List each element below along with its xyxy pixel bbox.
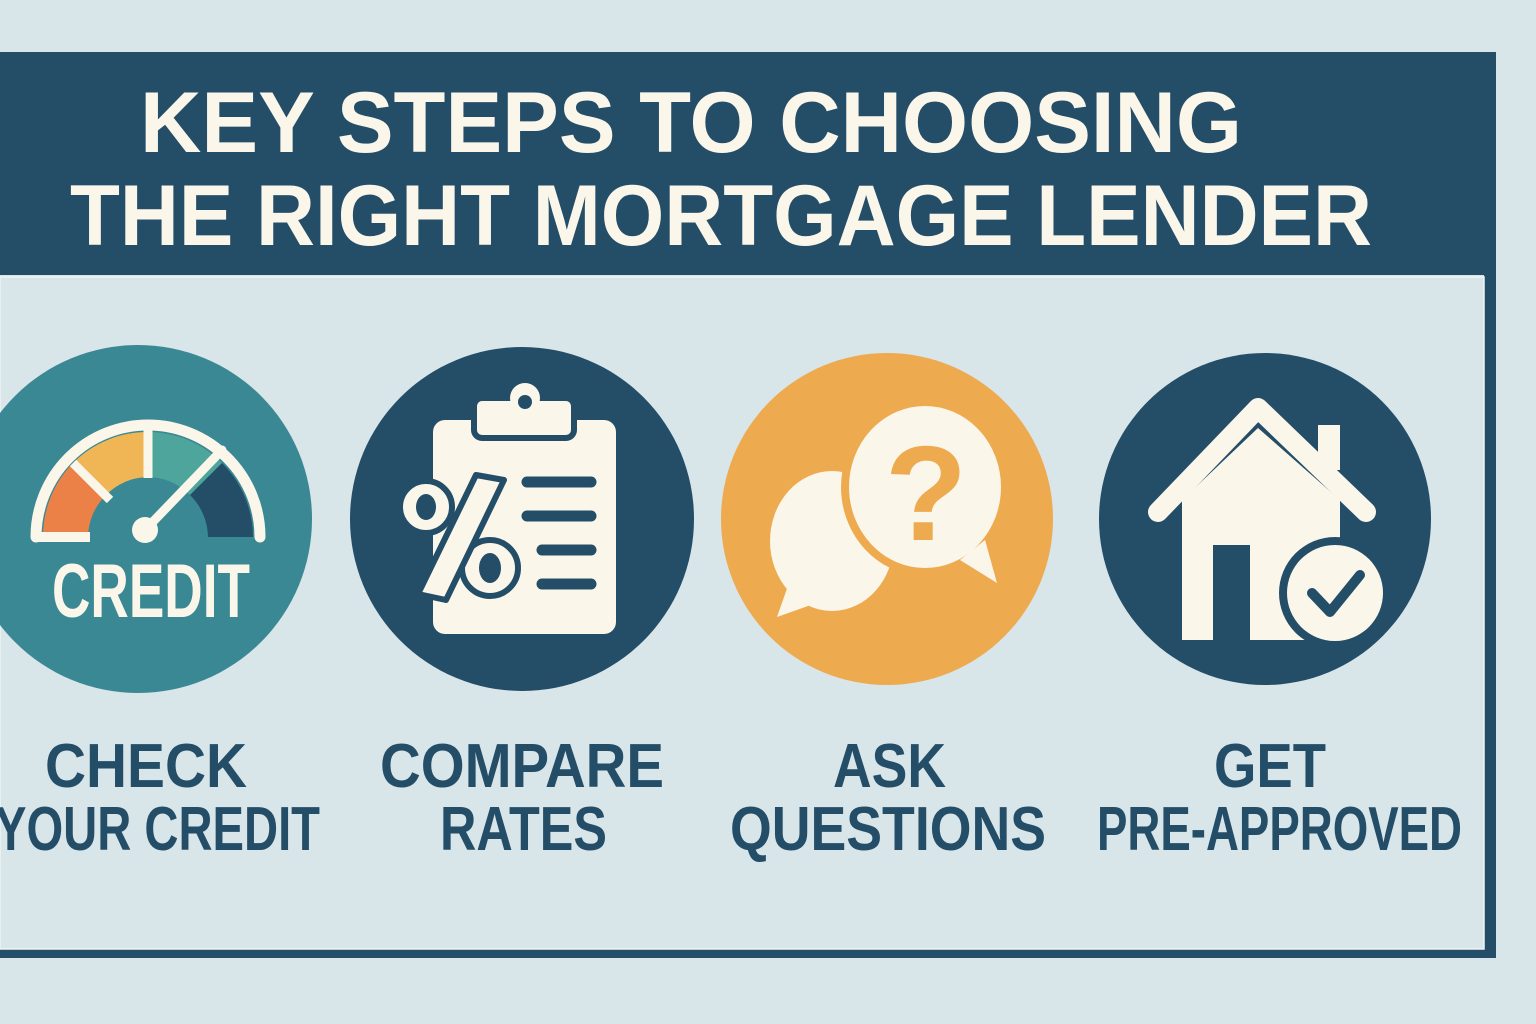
- label: ask questions: [730, 732, 1046, 864]
- title banner: KEY STEPS TO CHOOSING: [140, 75, 1242, 171]
- step 2: compare rates: [350, 347, 694, 864]
- label: compare rates: RATES: [440, 795, 607, 864]
- label: check your credit: CHECK: [45, 732, 247, 801]
- icon: credit gauge: [0, 345, 312, 693]
- label: ask questions: QUESTIONS: [730, 795, 1046, 864]
- icon: speech bubbles: [721, 353, 1053, 685]
- label: check your credit: YOUR CREDIT: [0, 795, 320, 864]
- label: get pre-approved: GET: [1214, 732, 1326, 801]
- title banner: THE RIGHT MORTGAGE LENDER: [70, 168, 1372, 264]
- icon: credit gauge: CREDIT: [52, 549, 250, 634]
- step 3: ask questions: [721, 353, 1053, 864]
- label: get pre-approved: [1097, 732, 1462, 864]
- step 4: get pre-approved: [1097, 353, 1462, 864]
- icon: speech bubbles: ?: [885, 418, 967, 569]
- label: compare rates: COMPARE: [380, 732, 664, 801]
- label: check your credit: [0, 732, 320, 864]
- step 1: check your credit: [0, 345, 320, 864]
- label: compare rates: [380, 732, 664, 864]
- icon: house with check: [1099, 353, 1431, 685]
- title banner: [0, 52, 1496, 275]
- icon: clipboard with percent: [350, 347, 694, 691]
- label: ask questions: ASK: [833, 732, 946, 801]
